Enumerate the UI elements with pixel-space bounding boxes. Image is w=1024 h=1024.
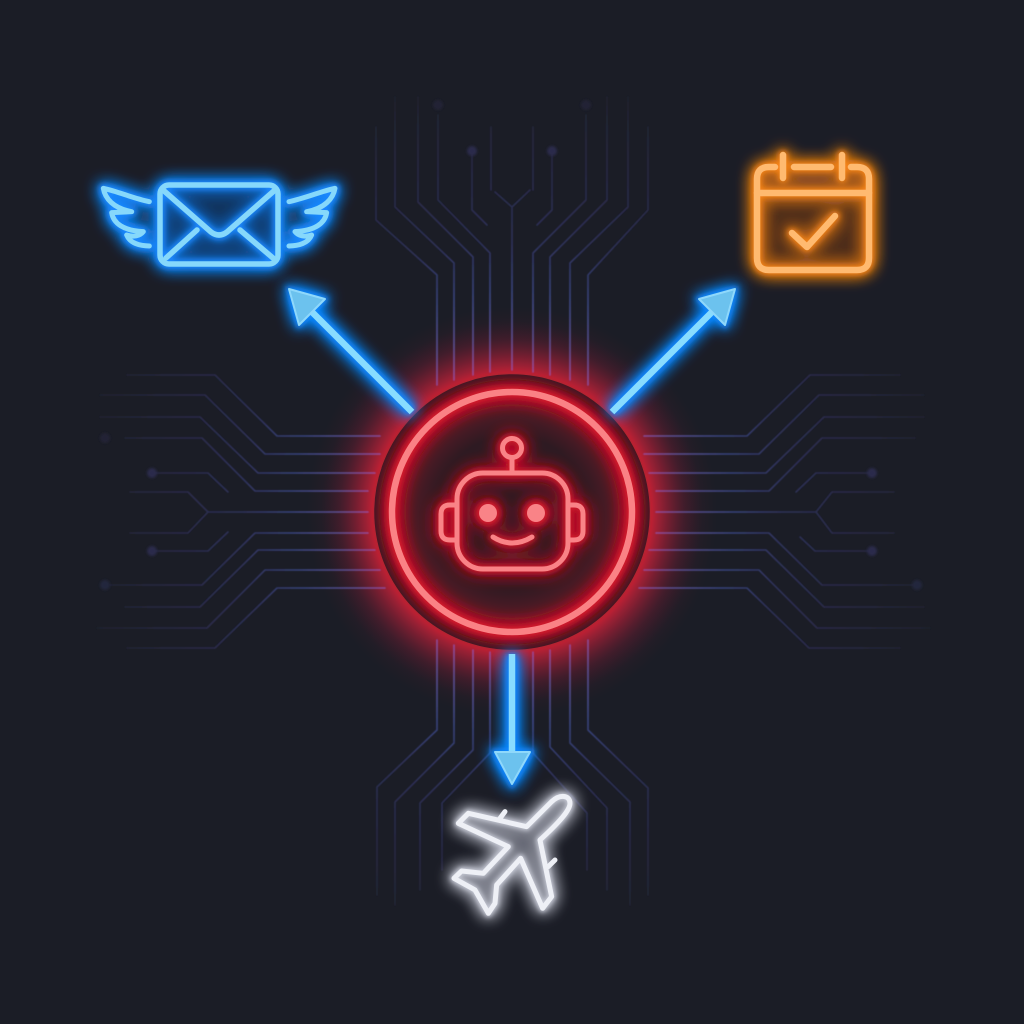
circuit end dots xyxy=(100,100,922,590)
icon: calendar with check xyxy=(757,155,869,270)
right wing xyxy=(289,188,335,246)
icon: airplane xyxy=(454,796,570,913)
robot glow xyxy=(441,438,583,569)
icon: winged envelope xyxy=(103,185,335,264)
circuit traces: left xyxy=(97,375,385,648)
red halo behind hub xyxy=(307,307,717,717)
icon: robot xyxy=(441,438,583,569)
central hub xyxy=(374,374,650,650)
arrow: hub to calendar xyxy=(612,289,735,412)
arrow: hub to email xyxy=(289,289,412,412)
calendar outline xyxy=(757,155,869,270)
arrow: hub to flight xyxy=(494,654,531,785)
airplane glow xyxy=(454,796,570,913)
envelope outline xyxy=(160,185,278,264)
circuit traces: top xyxy=(376,97,648,385)
hub ring xyxy=(392,392,632,632)
envelope glow xyxy=(103,185,335,264)
circuit traces: right xyxy=(639,375,930,648)
robot outline xyxy=(441,438,583,569)
circuit traces: bottom xyxy=(377,640,648,905)
circuit traces xyxy=(97,97,930,905)
calendar glow xyxy=(757,155,869,270)
hub disc xyxy=(374,374,650,650)
airplane outline xyxy=(454,796,570,913)
left wing xyxy=(103,188,149,246)
